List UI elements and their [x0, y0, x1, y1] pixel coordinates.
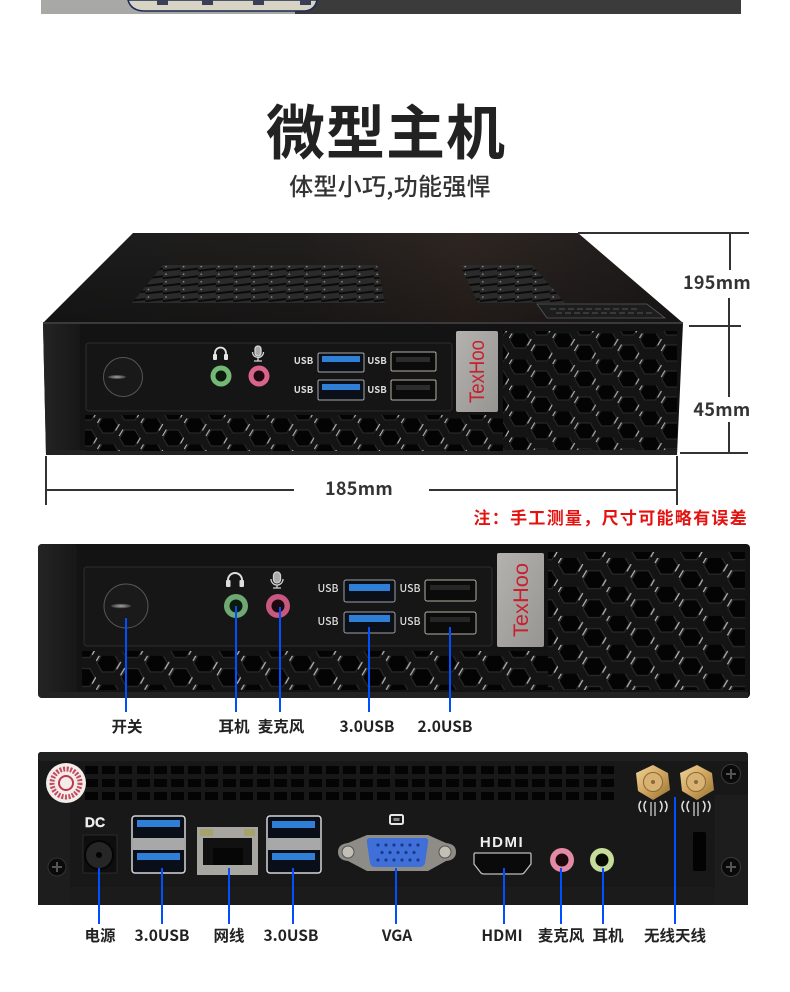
USB port labels: USB: [294, 382, 314, 396]
green audio jack: [590, 848, 614, 872]
security slot: [693, 832, 706, 871]
DC power socket: [83, 835, 117, 873]
top vent right: [460, 265, 565, 303]
front panel photo: [38, 544, 750, 698]
power button: [104, 358, 142, 396]
front labels: 3.0USB: [340, 715, 394, 737]
rear panel photo: [38, 752, 748, 905]
mesh lower: [82, 651, 548, 690]
rear labels: 电源: [84, 924, 116, 946]
USB 3.0 stack left: [132, 816, 185, 873]
warranty seal sticker: [46, 763, 86, 803]
TexHoo badge: [497, 553, 544, 647]
dimension label: 185mm: 185mm: [325, 475, 393, 501]
front labels: 开关: [111, 715, 143, 737]
DC label: DC: [85, 814, 105, 830]
USB port labels: USB: [367, 353, 387, 367]
control panel: [86, 343, 452, 411]
rear labels: 3.0USB: [264, 924, 318, 946]
USB labels: USB: [318, 614, 338, 629]
rear labels: 3.0USB: [135, 924, 189, 946]
icon: headphones: [226, 573, 244, 587]
rear labels: 麦克风: [538, 924, 585, 946]
USB port labels: USB: [294, 353, 314, 367]
front labels: [111, 715, 472, 737]
antenna connector 1: [636, 765, 670, 800]
icon: headphones: [213, 348, 228, 360]
rear labels: 耳机: [592, 924, 624, 946]
rear labels: 无线天线: [644, 924, 706, 946]
front face: [43, 323, 683, 455]
callout lines: front: [126, 606, 450, 712]
green audio jack: [210, 366, 232, 386]
product photo: angled mini PC: [43, 233, 683, 455]
front mesh lower: [85, 415, 503, 451]
green audio jack: [224, 594, 248, 618]
USB labels: USB: [400, 581, 420, 596]
front labels: 麦克风: [258, 715, 305, 737]
USB 3.0 ports: [344, 580, 395, 633]
callout lines: rear: [99, 797, 675, 924]
mesh right: [548, 552, 745, 690]
RJ45 network port: [197, 827, 258, 875]
USB port labels: [294, 353, 387, 396]
screws right: [722, 764, 740, 876]
measurement note: 注：手工测量，尺寸可能略有误差: [474, 504, 748, 529]
front mesh right: [503, 331, 677, 450]
top surface: [43, 233, 683, 323]
top image strip: [41, 0, 741, 14]
TexHoo badge: [456, 331, 498, 412]
icon: wifi 1: [639, 801, 667, 816]
screw left: [48, 858, 66, 876]
HDMI label: HDMI: [480, 834, 524, 851]
dimension lines: [46, 233, 749, 505]
TexHoo badge: TexHoo: [466, 340, 489, 403]
rating sticker: [537, 304, 665, 318]
USB 3.0 stack right: [267, 816, 321, 873]
pink audio jack: [266, 594, 290, 618]
subtitle: 体型小巧,功能强悍: [289, 167, 491, 202]
USB labels: USB: [318, 581, 338, 596]
VGA port: [338, 835, 456, 871]
title: 微型主机: [266, 86, 506, 171]
rear labels: VGA: [381, 924, 412, 946]
rear labels: [84, 924, 706, 946]
icon: microphone: [252, 346, 264, 361]
USB 2.0 ports: [425, 580, 476, 634]
rear vent grid: [85, 766, 614, 800]
dimension label: 195mm: 195mm: [683, 269, 751, 295]
icon: microphone: [271, 572, 283, 588]
icon: wifi 2: [682, 801, 710, 816]
dimension label: 45mm: 45mm: [693, 396, 751, 422]
USB 2.0 ports: [391, 352, 436, 400]
front labels: 耳机: [218, 715, 250, 737]
antenna connector 2: [680, 765, 714, 800]
pink audio jack: [550, 848, 574, 872]
icon: VGA: [390, 815, 403, 824]
top vent left: [132, 265, 385, 303]
front labels: 2.0USB: [418, 715, 472, 737]
rear labels: 网线: [213, 924, 245, 946]
power button: [104, 584, 148, 628]
USB labels: [318, 581, 420, 629]
pink audio jack: [248, 366, 270, 386]
control panel: [84, 567, 492, 646]
rear labels: HDMI: [481, 924, 523, 946]
HDMI port: [474, 853, 531, 874]
USB port labels: USB: [367, 382, 387, 396]
TexHoo badge: TexHoo: [510, 563, 533, 637]
USB labels: USB: [400, 614, 420, 629]
USB 3.0 ports: [318, 353, 364, 400]
